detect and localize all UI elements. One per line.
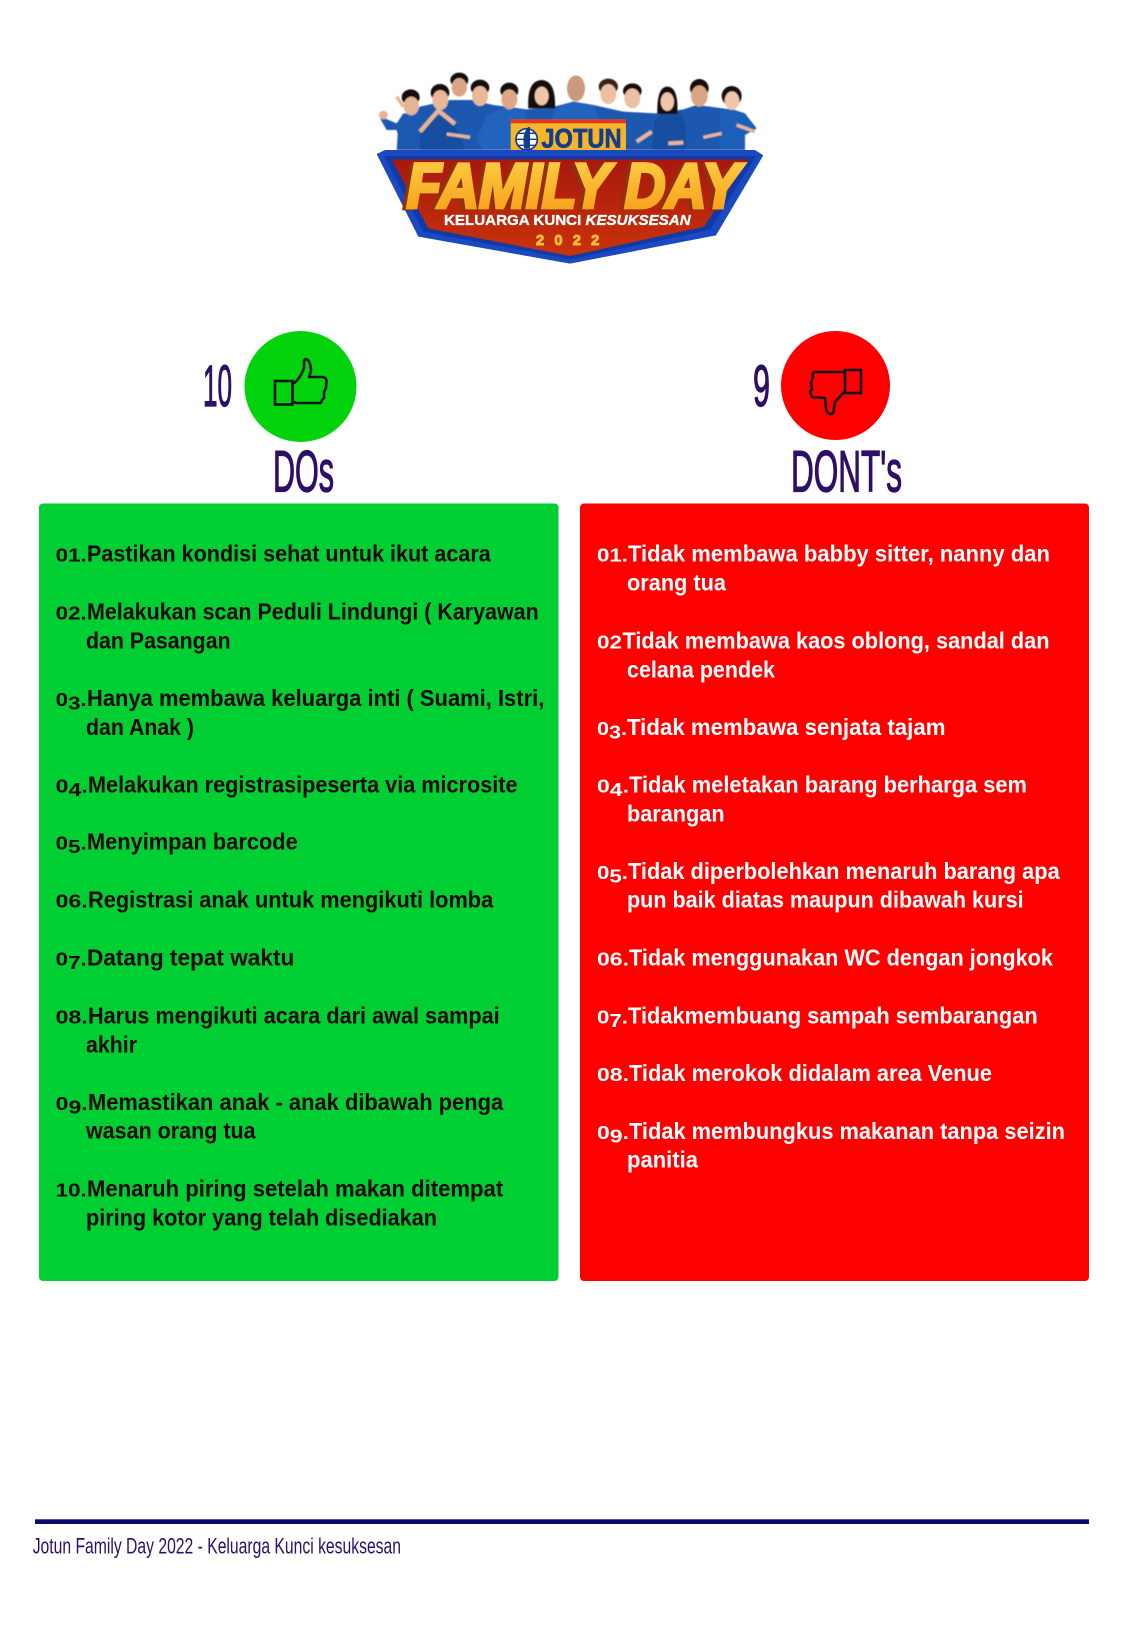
item 03: . [81, 689, 87, 710]
panel background red [580, 504, 1089, 1281]
item 09: 9 [69, 1096, 81, 1118]
item 03: Tidak membawa senjata tajam [627, 714, 946, 740]
item 05: 5 [609, 866, 622, 886]
item 09: panitia [627, 1147, 698, 1173]
item 02 [597, 627, 1050, 682]
item 04: . [623, 776, 629, 797]
item 09: 0 [597, 1122, 607, 1143]
heading: DONT's: DONT's [791, 440, 902, 505]
item 02: Tidak membawa kaos oblong, sandal dan [622, 627, 1050, 653]
item 04: 0 [56, 776, 66, 797]
item 09: . [81, 1093, 88, 1114]
item 04: Tidak meletakan barang berharga sem [629, 772, 1027, 798]
icon: green circle with thumbs up [244, 331, 356, 442]
item 04: Melakukan registrasipeserta via microsite [88, 772, 518, 798]
item 05 [597, 858, 1060, 913]
item 01: 01. [56, 545, 87, 566]
item 03: 3 [609, 722, 621, 742]
item 06: 06. [56, 890, 88, 911]
item 02 [56, 598, 539, 653]
heading group: DOs [203, 331, 356, 505]
item 09: Memastikan anak - anak dibawah penga [88, 1089, 503, 1115]
item 07: 7 [609, 1010, 622, 1031]
item 05: 0 [56, 832, 66, 853]
item 07: Tidakmembuang sampah sembarangan [628, 1002, 1038, 1028]
item 09: wasan orang tua [85, 1118, 256, 1144]
item 08: Tidak merokok didalam area Venue [629, 1060, 992, 1086]
panel: DONT's list [580, 504, 1089, 1281]
item 08 [56, 1002, 500, 1058]
item 09 [56, 1089, 503, 1144]
item 01 [597, 541, 1050, 595]
item 03: dan Anak ) [86, 714, 194, 740]
panel: DOs list [39, 504, 558, 1281]
item 10: 10. [56, 1180, 87, 1201]
icon: red circle with thumbs down [781, 331, 890, 440]
item 02: celana pendek [627, 656, 775, 682]
Jotun wordmark: JOTUN [541, 123, 622, 153]
item 05: pun baik diatas maupun dibawah kursi [627, 887, 1024, 913]
item 06: Tidak menggunakan WC dengan jongkok [629, 944, 1053, 970]
item 03 [56, 685, 544, 740]
tagline: KELUARGA KUNCI KESUKSESAN [444, 213, 691, 229]
item 02: 02 [597, 631, 622, 652]
year: 2022 [536, 233, 599, 249]
item 03: 3 [68, 692, 81, 714]
item 01: Pastikan kondisi sehat untuk ikut acara [87, 541, 491, 567]
item 04: 4 [69, 779, 82, 800]
item 03: Hanya membawa keluarga inti ( Suami, Istri, [87, 685, 544, 711]
team photo group [379, 73, 757, 150]
item 08: 08. [56, 1006, 88, 1027]
item 05: 5 [68, 836, 81, 857]
item 06: 06. [597, 948, 629, 969]
item 04: barangan [627, 801, 725, 827]
item 01: 01. [597, 545, 628, 566]
item 09: 9 [610, 1126, 623, 1146]
item 10: Menaruh piring setelah makan ditempat [87, 1176, 504, 1202]
item 03: 0 [597, 718, 607, 739]
item 01: Tidak membawa babby sitter, nanny dan [628, 541, 1050, 567]
item 05: . [622, 862, 628, 883]
badge shape [377, 150, 763, 264]
item 07: 7 [68, 952, 81, 973]
item 04 [597, 772, 1027, 827]
item 03: 0 [56, 689, 66, 710]
count: 9: 9 [753, 354, 770, 419]
Jotun emblem [516, 127, 537, 150]
item 06: Registrasi anak untuk mengikuti lomba [88, 886, 493, 912]
logo: Jotun Family Day [377, 73, 763, 264]
item 08: Harus mengikuti acara dari awal sampai [88, 1002, 500, 1028]
heading: DOs: DOs [273, 440, 334, 505]
Jotun sign [511, 119, 626, 153]
Family Day wordmark: FAMILY DAY [407, 151, 744, 221]
item 03: . [621, 718, 627, 739]
item 02: Melakukan scan Peduli Lindungi ( Karyawan [87, 598, 539, 624]
item 05: Tidak diperbolehkan menaruh barang apa [628, 858, 1060, 884]
item 07: . [622, 1006, 628, 1027]
item 07: 0 [56, 948, 66, 969]
item 04: 4 [610, 779, 623, 800]
panel background green [39, 504, 558, 1281]
item 04: 0 [597, 776, 607, 797]
item 05: 0 [597, 862, 607, 883]
item 07: 0 [597, 1006, 607, 1027]
item 08: 08. [597, 1064, 629, 1085]
heading group: DOs: 10 [203, 354, 232, 419]
item 01: orang tua [627, 569, 726, 595]
item 09: 0 [56, 1093, 66, 1114]
item 04: . [81, 776, 88, 797]
item 07: Datang tepat waktu [87, 944, 294, 970]
item 09: . [623, 1122, 629, 1143]
item 09 [597, 1118, 1065, 1173]
item 05: Menyimpan barcode [87, 828, 298, 854]
item 09: Tidak membungkus makanan tanpa seizin [629, 1118, 1065, 1144]
footer rule [35, 1519, 1089, 1524]
item 10: piring kotor yang telah disediakan [86, 1204, 437, 1230]
item 02: dan Pasangan [86, 627, 231, 653]
item 05: . [81, 832, 87, 853]
heading group: DONT's [753, 331, 902, 505]
footer text: Jotun Family Day 2022 - Keluarga Kunci kesuksesan [33, 1534, 401, 1558]
item 07: . [81, 948, 87, 969]
item 02: 02. [56, 602, 87, 623]
item 08: akhir [86, 1032, 137, 1058]
item 10 [56, 1176, 504, 1230]
